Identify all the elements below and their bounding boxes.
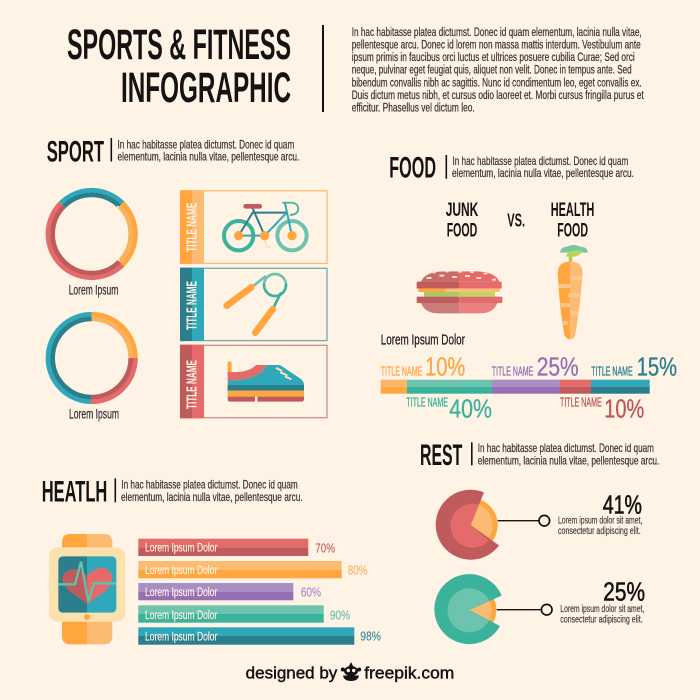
section heading: sport: elementum, lacinia nulla vitae, pellentesque arcu.	[118, 150, 299, 164]
horizontal bar: 80%	[138, 561, 367, 578]
horizontal bar: 98%: Lorem Ipsum Dolor	[145, 631, 217, 643]
icon: shoe	[228, 361, 304, 402]
title: INFOGRAPHIC	[121, 65, 291, 112]
bar label: 15% teal	[591, 352, 677, 382]
section heading: health: elementum, lacinia nulla vitae, pellentesque arcu.	[121, 490, 303, 504]
bar label: 40% green	[406, 393, 492, 423]
stacked bar heading: Lorem Ipsum Dolor	[381, 332, 465, 348]
stat: 25%: Lorem ipsum dolor sit amet,	[560, 604, 644, 615]
credit: designed by freepik: freepik.com	[364, 664, 454, 682]
stat: 41%: 41%	[603, 489, 642, 519]
horizontal bar: 90%: Lorem Ipsum Dolor	[145, 610, 217, 622]
connector 25%	[497, 604, 552, 615]
bar label: 10% red: TITLE NAME	[560, 395, 602, 410]
stat: 25%: consectetur adipiscing elit.	[560, 615, 643, 626]
section heading: rest	[420, 439, 659, 472]
section heading: food: FOOD	[389, 151, 436, 184]
stat: 25%: 25%	[603, 577, 645, 607]
stat: 41%: consectetur adipiscing elit.	[558, 526, 641, 537]
comparison labels: junk food vs health food: FOOD	[447, 220, 477, 242]
horizontal bar: 60%: 60%	[301, 586, 321, 600]
comparison labels: junk food vs health food: HEALTH	[551, 199, 594, 221]
connector 41%	[498, 515, 550, 526]
comparison labels: junk food vs health food: JUNK	[446, 199, 478, 221]
panel: hand grip: TITLE NAME	[184, 281, 200, 330]
title	[67, 22, 291, 112]
intro paragraph	[352, 25, 644, 114]
bar label: 40% green: TITLE NAME	[406, 395, 448, 410]
bar label: 10% red: 10%	[604, 393, 644, 423]
horizontal bar: 80%: Lorem Ipsum Dolor	[145, 565, 217, 577]
stat: 41%: Lorem ipsum dolor sit amet,	[558, 515, 642, 526]
stat: 41%	[558, 489, 642, 537]
bar label: 25% purple: TITLE NAME	[492, 364, 533, 379]
section heading: health	[42, 476, 303, 509]
panel: shoe	[180, 345, 327, 418]
bar label: 10% orange: TITLE NAME	[381, 364, 422, 379]
icon: smartwatch with heart	[49, 534, 125, 644]
section heading: health: In hac habitasse platea dictumst. Donec id quam	[121, 477, 298, 491]
panel: bicycle	[180, 190, 327, 264]
bar label: 15% teal: TITLE NAME	[591, 364, 633, 379]
horizontal bar: 98%	[138, 627, 381, 645]
horizontal bar: 70%: 70%	[315, 541, 335, 555]
stat: 25%	[560, 577, 645, 626]
horizontal bar: 70%: Lorem Ipsum Dolor	[145, 543, 217, 555]
intro paragraph: efficitur. Phasellus vel dictum leo.	[352, 100, 475, 114]
horizontal bar: 60%	[138, 583, 321, 600]
ring 2 label: Lorem Ipsum	[69, 407, 119, 422]
bar label: 10% orange: 10%	[425, 352, 465, 382]
credit: designed by freepik	[246, 662, 454, 682]
panel: shoe: TITLE NAME	[184, 360, 200, 409]
ring chart 1	[30, 172, 154, 296]
comparison labels: junk food vs health food: VS.	[507, 210, 525, 231]
section heading: food	[389, 151, 634, 184]
comparison labels: junk food vs health food	[446, 199, 594, 242]
bar label: 25% purple: 25%	[537, 352, 579, 382]
horizontal bar: 90%: 90%	[330, 608, 350, 622]
section heading: rest: REST	[420, 439, 462, 472]
section heading: sport: In hac habitasse platea dictumst. Donec id quam	[118, 138, 294, 152]
bar label: 25% purple	[492, 352, 579, 382]
bar label: 15% teal: 15%	[637, 352, 677, 382]
icon: carrot	[558, 245, 588, 339]
section heading: sport	[47, 135, 299, 168]
horizontal bar: 90%	[138, 605, 350, 623]
icon: freepik logo	[341, 662, 361, 681]
bar label: 40% green: 40%	[449, 393, 492, 423]
comparison labels: junk food vs health food: FOOD	[557, 220, 588, 242]
icon: hand grip	[227, 274, 286, 333]
bar label: 10% red	[560, 393, 644, 423]
horizontal bar: 98%: 98%	[360, 630, 381, 644]
pie chart 25%	[434, 574, 502, 644]
icon: burger	[417, 271, 502, 313]
icon: bicycle	[224, 203, 307, 250]
title: SPORTS & FITNESS	[67, 22, 291, 69]
horizontal bar: 80%: 80%	[348, 564, 367, 578]
panel: hand grip	[180, 268, 327, 341]
horizontal bar: 60%: Lorem Ipsum Dolor	[145, 587, 217, 599]
section heading: sport: SPORT	[47, 135, 104, 168]
section heading: health: HEATLH	[42, 476, 107, 509]
horizontal bar: 70%	[138, 539, 335, 556]
bar label: 10% orange	[381, 352, 465, 382]
credit: designed by freepik: designed by	[246, 664, 338, 682]
pie chart 41%	[436, 490, 499, 560]
ring 1 label: Lorem Ipsum	[69, 282, 118, 297]
ring chart 2	[48, 314, 135, 402]
stacked bar chart	[381, 380, 650, 394]
panel: bicycle: TITLE NAME	[184, 203, 200, 252]
